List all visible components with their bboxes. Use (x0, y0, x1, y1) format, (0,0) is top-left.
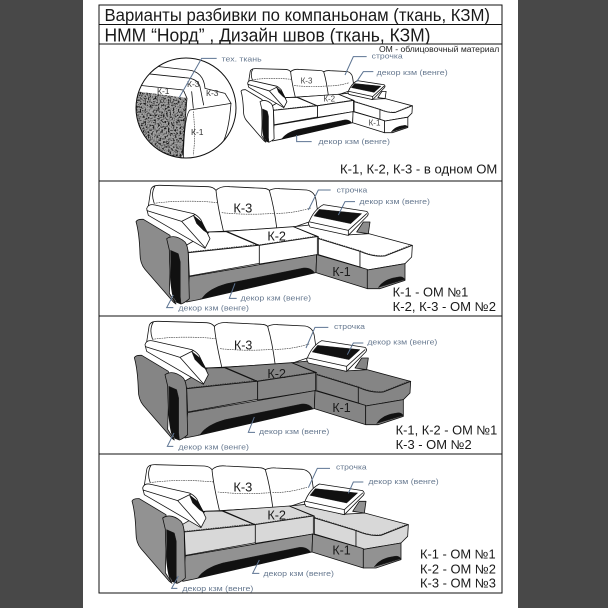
panel 3: K-1 K-2 material 1, K-3 material 2 (99, 316, 502, 454)
heading: first line: Варианты разбивки по компаньонам (ткань, КЗМ) (104, 5, 490, 25)
annotations panel 3: декор кзм (венге) (259, 427, 330, 436)
annotations panel 3: К-2 (267, 367, 286, 381)
annotations panel 4: К-1 (332, 543, 351, 557)
annotations panel 2: строчка (337, 185, 368, 194)
annotations panel 4: К-2 (267, 508, 286, 522)
annotations panel 2: декор кзм (венге) (359, 197, 431, 206)
annotations panel 2 (167, 185, 496, 314)
sofa variant 3 (134, 321, 411, 440)
annotations panel 2: К-1 (332, 265, 351, 279)
annotations panel 3: К-1 (332, 401, 351, 415)
annotations panel 3: К-3 (234, 339, 252, 353)
annotations panel 4: строчка (336, 462, 368, 471)
annotations panel 4: К-1 - ОМ №1 (420, 548, 496, 562)
annotations panel 1: К-1 (369, 118, 381, 127)
annotations panel 1: К-2 (323, 95, 336, 104)
magnified fabric detail: К-1 (157, 86, 170, 96)
annotations panel 4 (172, 462, 496, 593)
annotations panel 4: К-3 - ОМ №3 (420, 577, 496, 591)
annotations panel 1: декор кзм (венге) (377, 68, 448, 77)
annotations panel 1: К-1, К-2, К-3 - в одном ОМ (340, 161, 497, 176)
annotations panel 1: строчка (372, 51, 404, 60)
annotations panel 2: К-1 - ОМ №1 (393, 286, 468, 300)
annotations panel 3: декор кзм (венге) (178, 442, 250, 451)
annotations panel 3: строчка (334, 322, 366, 331)
annotations panel 2: К-2, К-3 - ОМ №2 (393, 300, 496, 314)
annotations panel 3 (167, 322, 497, 452)
annotations panel 4: К-2 - ОМ №2 (420, 562, 496, 576)
annotations panel 4: К-3 (233, 481, 252, 495)
page sheet (83, 0, 518, 608)
magnified fabric detail: К-1 (191, 127, 204, 137)
annotations panel 2: К-2 (267, 230, 286, 244)
sofa variant 2 (136, 185, 412, 304)
annotations panel 4: декор кзм (венге) (182, 584, 254, 593)
annotations panel 1: ОМ - облицовочный материал (379, 45, 500, 54)
annotations panel 1 (179, 45, 500, 176)
annotations panel 4: декор кзм (венге) (263, 569, 335, 578)
annotations panel 3: К-3 - ОМ №2 (396, 438, 472, 452)
annotations panel 2: декор кзм (венге) (241, 294, 312, 303)
annotations panel 3: декор кзм (венге) (367, 338, 438, 347)
annotations panel 2: декор кзм (венге) (178, 304, 250, 313)
magnified fabric detail: К-3 (206, 88, 219, 98)
panel 4: three materials (99, 454, 502, 593)
panel 2: K-1 material 1, K-2 K-3 material 2 (99, 181, 502, 316)
sofa: single material (241, 69, 412, 142)
annotations panel 4: декор кзм (венге) (368, 477, 439, 486)
sofa variant 4 (132, 465, 408, 583)
annotations panel 1: тех. ткань (222, 54, 262, 63)
annotations panel 2: К-3 (233, 202, 252, 216)
annotations panel 1: декор кзм (венге) (318, 137, 391, 146)
magnified fabric detail: К-3 (187, 79, 200, 89)
magnified fabric detail (136, 58, 236, 158)
annotations panel 1: К-3 (301, 76, 313, 85)
heading: second line: НММ “Норд” , Дизайн швов (ткань, КЗМ) (104, 25, 430, 46)
panel 1: all parts in one material (99, 44, 502, 181)
annotations panel 3: К-1, К-2 - ОМ №1 (396, 424, 497, 438)
